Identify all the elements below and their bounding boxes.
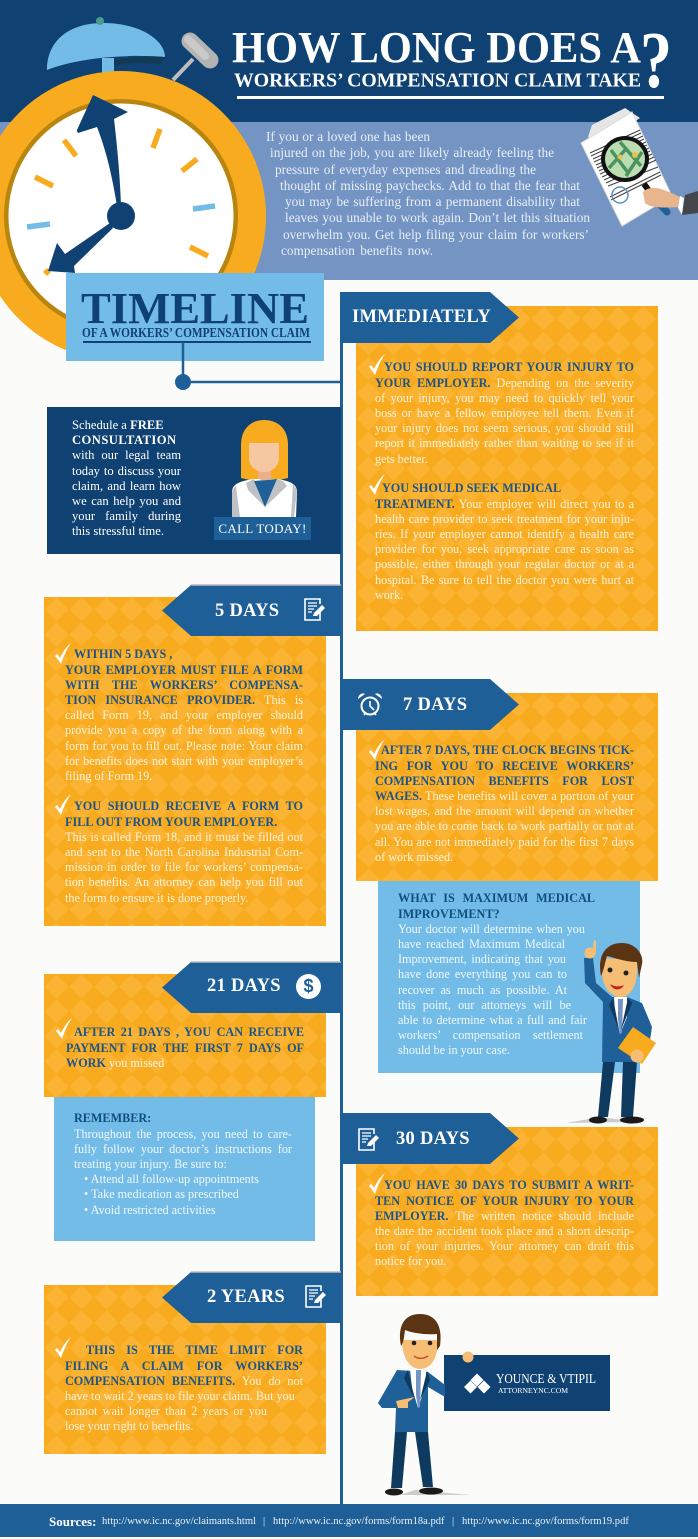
5 days text 1 (65, 647, 303, 783)
2 years text: lose your right to benefits. (65, 1419, 193, 1433)
icon: check (55, 794, 71, 815)
consultation text: claim, and learn how (72, 479, 181, 493)
label: 5 days: 5 DAYS (215, 601, 279, 621)
consultation text: your family during (72, 509, 181, 523)
immediately text 1 (375, 360, 634, 466)
panel: remember (54, 1097, 315, 1241)
title: WORKERS’ COMPENSATION CLAIM TAKE (234, 70, 641, 92)
intro paragraph: overwhelm you. Get help filing your claim for workers’ (283, 227, 589, 242)
immediately text 2: TREATMENT. Your employer will direct you to a (375, 497, 634, 511)
label: 21 days: 21 DAYS (207, 976, 281, 996)
5 days text 2: and sent to the North Carolina Industrial Com- (65, 845, 303, 859)
consultation text: CONSULTATION (72, 433, 177, 447)
separator: | (452, 1516, 454, 1527)
7 days text (375, 743, 634, 864)
main timeline line (340, 292, 343, 1505)
remember text: REMEMBER: (74, 1111, 151, 1125)
immediately text 1: report it immediately rather than waiting to see if it (375, 436, 634, 450)
intro paragraph: thought of missing paychecks. Add to that the fear that (280, 178, 580, 193)
30 days text: YOU HAVE 30 DAYS TO SUBMIT A WRIT- (384, 1178, 634, 1192)
mmi text: this point, our attorneys will be (398, 998, 571, 1012)
2 years text: cannot wait longer than 2 years or you (65, 1404, 267, 1418)
remember text: Throughout the process, you need to care- (74, 1127, 292, 1141)
immediately text 1: YOU SHOULD REPORT YOUR INJURY TO (384, 360, 634, 374)
intro paragraph: If you or a loved one has been (266, 129, 430, 144)
consultation text (72, 418, 181, 538)
7 days text: ING FOR YOU TO RECEIVE WORKERS’ (375, 759, 634, 773)
sources label: Sources: (49, 1514, 96, 1529)
icon: check (55, 1337, 71, 1358)
2 years text: COMPENSATION BENEFITS. You do not (65, 1374, 303, 1388)
separator: | (263, 1516, 265, 1527)
7 days text: COMPENSATION BENEFITS FOR LOST (375, 774, 634, 788)
mmi text: IMPROVEMENT? (398, 907, 500, 921)
arrow: 2 years (162, 1271, 341, 1323)
immediately text 1: boss or have a fellow employee tell them. Even if (375, 406, 634, 420)
immediately text 1: gets better. (375, 452, 428, 466)
remember text (74, 1111, 292, 1217)
icon: check (56, 1018, 72, 1039)
sources footer (0, 1504, 698, 1537)
intro band (0, 122, 698, 280)
7 days text: all. You are not immediately paid for the first 7 days (375, 835, 634, 849)
label: 30 days: 30 DAYS (396, 1129, 470, 1149)
immediately text 2: provider for you, seek appropriate care as soon as (375, 542, 634, 556)
panel: free consultation (47, 407, 341, 554)
call today button (214, 517, 311, 540)
icon: check (369, 1173, 385, 1194)
label: immediately: IMMEDIATELY (352, 307, 491, 327)
source link 2: http://www.ic.nc.gov/forms/form18a.pdf (273, 1516, 445, 1527)
immediately text 1: your injury does not seem serious, you should still (375, 421, 634, 435)
immediately text 2 (375, 481, 634, 602)
arrow: 7 days (343, 679, 519, 730)
2 years text: FILING A CLAIM FOR WORKERS’ (65, 1359, 303, 1373)
icon: document and pencil (305, 1285, 326, 1308)
5 days text 1: for benefits does not start with your employer’s (65, 754, 303, 768)
immediately text 2: hospital. Be sure to tell the doctor you were hurt at (375, 573, 634, 587)
arrow: 5 days (162, 584, 341, 636)
21 days text: AFTER 21 DAYS , YOU CAN RECEIVE (74, 1025, 304, 1039)
intro paragraph: compensation benefits now. (281, 243, 433, 258)
intro paragraph: leaves you unable to work again. Don’t let this situation (285, 210, 590, 225)
immediately text 2: health care provider to seek treatment for your inju- (375, 512, 634, 526)
5 days text 2: mission in order to file for workers’ compensa- (65, 860, 303, 874)
5 days text 1: TION INSURANCE PROVIDER. This is (65, 693, 303, 707)
5 days text 2: YOU SHOULD RECEIVE A FORM TO (74, 799, 303, 813)
consultation text: we can help you and (72, 494, 181, 508)
immediately text 2: ries. If your employer cannot identify a health care (375, 527, 634, 541)
icon: check (369, 354, 385, 375)
call today button: CALL TODAY! (218, 521, 307, 536)
panel: 7 days (356, 693, 658, 881)
consultation text: Schedule a FREE (72, 418, 164, 432)
30 days text: EMPLOYER. The written notice should include (375, 1209, 634, 1223)
consultation text: today to discuss your (72, 464, 181, 478)
30 days text: the date the accident took place and a short descrip- (375, 1224, 634, 1238)
icon: man pointing up with folder (566, 940, 656, 1124)
5 days text 1: WITH THE WORKERS’ COMPENSA- (65, 678, 303, 692)
immediately text 1: of your injury, you may need to quickly tell your (375, 391, 634, 405)
5 days text 1: YOUR EMPLOYER MUST FILE A FORM (65, 663, 303, 677)
5 days text 2: tion benefits. An attorney can help you fill out (65, 875, 303, 889)
mmi text: workers’ compensation settlement (398, 1028, 583, 1042)
intro paragraph (266, 129, 590, 258)
immediately text 2: YOU SHOULD SEEK MEDICAL (382, 481, 561, 495)
icon: check (55, 643, 71, 664)
7 days text: of work missed. (375, 850, 453, 864)
icon: woman attorney (232, 420, 297, 517)
timeline connector with node (175, 342, 340, 390)
label: 7 days: 7 DAYS (403, 695, 467, 715)
mmi text: have reached Maximum Medical (398, 937, 565, 951)
source link 1: http://www.ic.nc.gov/claimants.html (102, 1516, 256, 1527)
panel: 30 days (356, 1127, 658, 1296)
timeline heading panel: TIMELINE (81, 284, 309, 333)
remember text: treating your injury. Be sure to: (74, 1157, 227, 1171)
mmi text: have done everything you can to (398, 967, 567, 981)
remember text: • Take medication as prescribed (84, 1187, 239, 1201)
30 days text (375, 1178, 634, 1268)
icon: check (369, 739, 385, 760)
panel: 5 days (44, 597, 326, 926)
alarm clock illustration (0, 17, 266, 350)
label: 2 years: 2 YEARS (207, 1287, 285, 1307)
panel: maximum medical improvement (378, 881, 640, 1073)
mmi text: should be in your case. (398, 1043, 510, 1057)
7 days text: lost wages, and the amount will depend on whether (375, 804, 634, 818)
5 days text 2: the form to ensure it is done properly. (65, 891, 248, 905)
timeline heading panel (66, 273, 324, 361)
5 days text 1: form for you to fill out. Please note: Your claim (65, 739, 303, 753)
mmi text: Your doctor will determine when you (398, 922, 585, 936)
2 years text (65, 1343, 304, 1433)
immediately text 1: YOUR EMPLOYER. Depending on the severity (375, 376, 634, 390)
remember text: • Avoid restricted activities (84, 1203, 216, 1217)
intro paragraph: you may be suffering from a permanent disability that (285, 194, 580, 209)
consultation text: with our legal team (72, 448, 181, 462)
mmi text: WHAT IS MAXIMUM MEDICAL (398, 891, 595, 905)
intro paragraph: injured on the job, you are likely already feeling the (270, 145, 554, 160)
mmi text: recover as much as possible. At (398, 983, 567, 997)
21 days text (66, 1025, 304, 1070)
consultation text: this stressful time. (72, 524, 164, 538)
intro paragraph: pressure of everyday expenses and dreading the (275, 162, 536, 177)
2 years text: THIS IS THE TIME LIMIT FOR (86, 1343, 303, 1357)
mmi text: Improvement, indicating that you (398, 952, 566, 966)
21 days text: WORK you missed (66, 1056, 164, 1070)
icon: document and pencil (358, 1128, 379, 1151)
source link 3: http://www.ic.nc.gov/forms/form19.pdf (462, 1516, 629, 1527)
30 days text: tion of your injuries. Your attorney can draft this (375, 1239, 634, 1253)
7 days text: WAGES. These benefits will cover a portion of your (375, 789, 634, 803)
mmi text: able to determine what a full and fair (398, 1013, 587, 1027)
icon: document under magnifying glass (580, 108, 698, 227)
5 days text 1: filing of Form 19. (65, 769, 152, 783)
mmi text (398, 891, 595, 1057)
panel: 21 days (44, 974, 326, 1097)
icon: man holding sign (378, 1314, 474, 1496)
firm sign: YOUNCE & VTIPIL (496, 1371, 596, 1386)
arrow: 30 days (343, 1113, 519, 1164)
title: HOW LONG DOES A (232, 23, 641, 72)
icon: dollar: $ (303, 976, 314, 996)
2 years text: have to wait 2 years to file your claim. But you (65, 1389, 295, 1403)
panel: 2 years (44, 1285, 326, 1454)
icon: check (369, 474, 385, 495)
7 days text: you are able to come back to work partially or not at (375, 819, 634, 833)
remember text: fully follow your doctor’s instructions for (74, 1142, 292, 1156)
5 days text 1: WITHIN 5 DAYS , (74, 647, 172, 661)
icon: alarm clock (358, 693, 382, 716)
5 days text 1: called Form 19, and your employer should (65, 708, 303, 722)
5 days text 2: This is called Form 18, and it must be filled out (65, 830, 303, 844)
arrow: immediately (343, 292, 519, 343)
arrow: 21 days (162, 961, 341, 1013)
icon: document and pencil (304, 598, 325, 621)
immediately text 2: possible, either through your regular doctor or at a (375, 557, 634, 571)
title (232, 20, 672, 105)
30 days text: notice for you. (375, 1254, 446, 1268)
remember text: • Attend all follow-up appointments (84, 1172, 259, 1186)
5 days text 2 (65, 799, 303, 905)
icon: dollar (296, 974, 321, 999)
5 days text 1: provide you a copy of the form along with a (65, 723, 303, 737)
firm sign: ATTORNEYNC.COM (498, 1386, 568, 1395)
21 days text: PAYMENT FOR THE FIRST 7 DAYS OF (66, 1041, 304, 1055)
5 days text 2: FILL OUT FROM YOUR EMPLOYER. (65, 815, 277, 829)
immediately text 2: work. (375, 588, 403, 602)
panel: immediately (356, 306, 658, 631)
firm sign (444, 1355, 610, 1411)
header band (0, 0, 698, 122)
7 days text: AFTER 7 DAYS, THE CLOCK BEGINS TICK- (381, 743, 634, 757)
30 days text: TEN NOTICE OF YOUR INJURY TO YOUR (375, 1194, 634, 1208)
